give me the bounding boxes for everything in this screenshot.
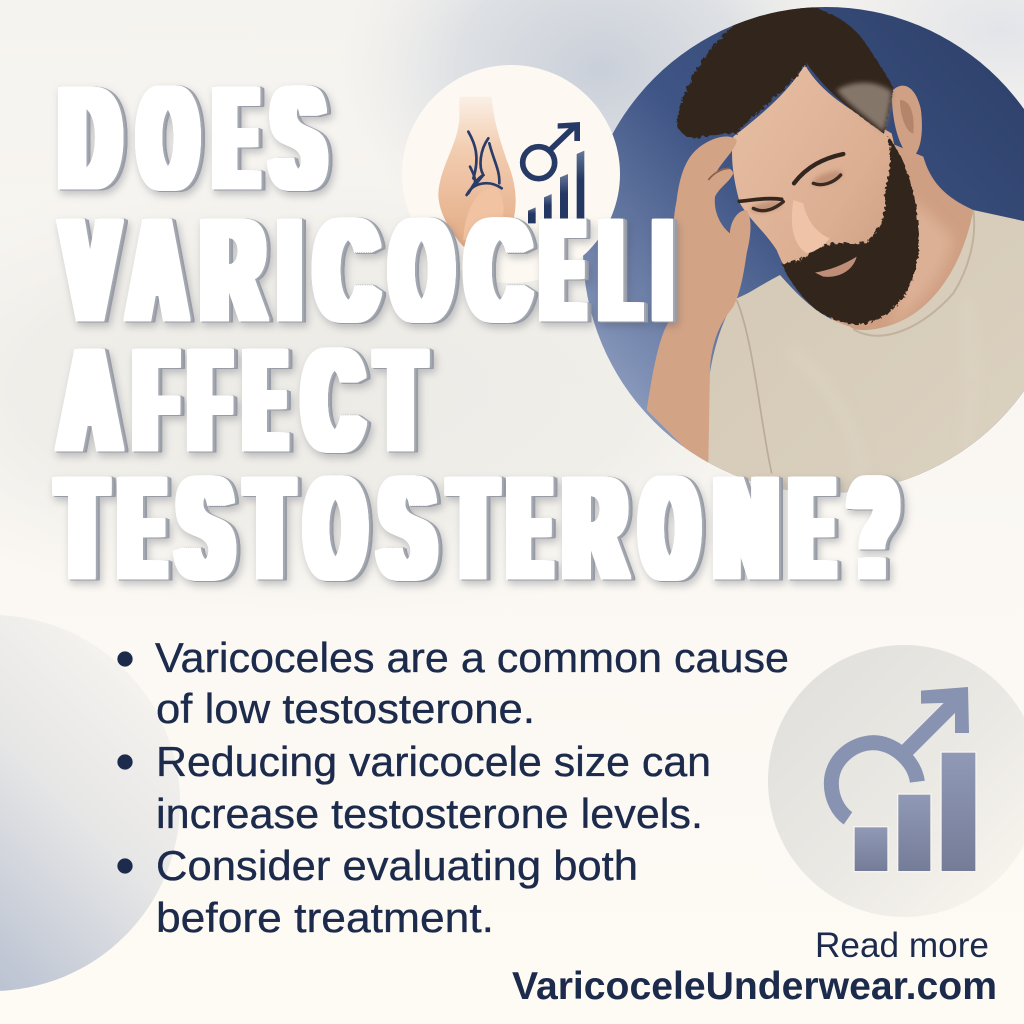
title line 4: T [241,448,281,610]
title line 4: O [299,448,355,610]
panel: testosterone icon circle [768,645,1024,917]
faded temple hair [837,83,892,132]
title line 2 [56,190,658,352]
bullet 1: of low testosterone. [156,685,535,732]
title line 3: C [296,320,352,482]
title line 4: T [444,448,485,610]
call to action [512,926,997,1008]
title line 2: R [194,190,254,352]
title line 1 [53,58,314,220]
face [732,65,894,264]
title line 1: O [132,58,187,220]
title line 3: F [128,320,166,482]
title line 2: I [273,190,289,352]
title line 4: E [113,448,154,610]
panel: medical icon circle [402,65,620,283]
bullet 3: before treatment. [156,894,494,941]
bullet 2: Reducing varicocele size can [156,738,711,785]
bullet 3 [118,842,638,941]
eye shadows [750,168,844,215]
title line 2: C [459,190,520,352]
shirt folds [790,300,971,480]
title line 3: A [52,320,110,482]
title line 4: O [634,448,688,610]
title: T [371,320,413,482]
nose shade [792,200,830,253]
mouth [815,257,857,277]
t-shirt [707,210,1024,500]
bullet 1: Varicoceles are a common cause [155,634,789,681]
bullet list [118,634,789,941]
call to action: Read more [815,926,989,965]
title line 2: A [122,190,176,352]
title line 4: N [707,448,768,610]
collar [853,211,974,336]
title line 4: E [502,448,540,610]
neck [830,144,974,330]
title line 4: S [171,448,222,610]
title line 2: C [308,190,368,352]
call to action: VaricoceleUnderwear.com [512,965,997,1008]
title line 3 [52,320,413,482]
title line 4 [52,448,888,610]
hair [677,2,893,138]
title line 1: S [265,58,314,220]
ear [892,86,922,157]
title line 4: ? [842,448,888,610]
title line 3: F [183,320,219,482]
bullet 2 [118,738,711,837]
title line 4: T [52,448,95,610]
title line 1: D [53,58,110,220]
icon: bar chart [854,752,976,872]
icon: varicocele anatomy [438,97,516,247]
title line 2: V [56,190,108,352]
title line 2: E [535,190,573,352]
man illustration [647,2,1024,500]
title: I [650,190,658,352]
panel: bottom-left decorative circle [0,615,180,991]
title line 4: E [784,448,823,610]
icon: male symbol with rising bars [523,122,584,223]
icon: male symbol arc and arrow [831,687,969,818]
title [52,58,888,610]
panel: man photo circle [575,0,1024,500]
title line 2: L [594,190,629,352]
bullet 3: Consider evaluating both [156,842,638,889]
brows and eyes [739,154,843,211]
hand and forearm [647,137,751,463]
bullet 2: increase testosterone levels. [156,790,703,837]
title line 4: R [556,448,616,610]
title line 4: S [373,448,424,610]
title line 1: E [208,58,247,220]
beard [782,137,919,324]
bullet 1 [118,634,789,732]
blue backdrop [575,0,1024,500]
title line 2: O [384,190,442,352]
title line 3: E [238,320,274,482]
